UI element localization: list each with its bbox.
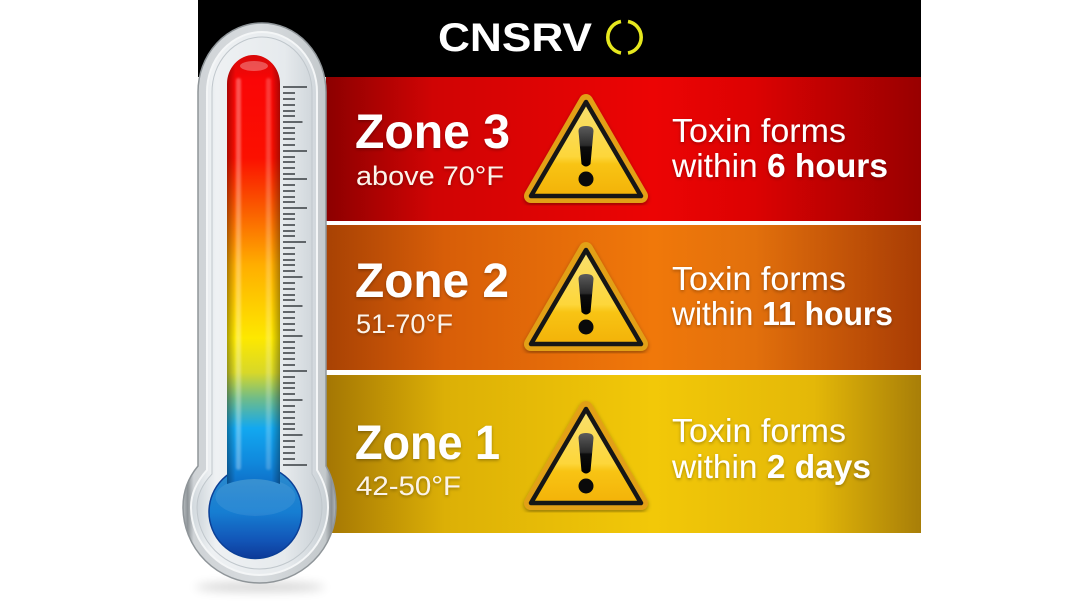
zone 3 toxin time: Toxin forms	[672, 112, 846, 149]
thermometer column	[227, 55, 280, 484]
panel: zone 2	[326, 225, 921, 370]
icon: warning triangle zone 2	[531, 249, 641, 344]
zone 2 temperature: 51-70°F	[356, 309, 453, 339]
zone 1 temperature: 42-50°F	[356, 471, 461, 501]
header bar	[198, 0, 921, 77]
zone 2 toxin duration: within 11 hours	[671, 295, 893, 332]
icon: warning triangle zone 3	[531, 101, 641, 196]
zone 3 toxin duration: within 6 hours	[671, 147, 888, 184]
zone 1 heading: Zone 1	[355, 417, 500, 470]
zone 3 heading: Zone 3	[355, 106, 510, 159]
icon: thermometer	[183, 23, 336, 591]
logo ring icon	[608, 22, 641, 53]
zone 2 toxin time: Toxin forms	[672, 260, 846, 297]
thermometer bulb	[209, 466, 302, 558]
zone 3 temperature: above 70°F	[356, 161, 504, 191]
zone 1 toxin time: Toxin forms	[672, 412, 846, 449]
panel: zone 1	[326, 375, 921, 533]
zone 2 heading: Zone 2	[355, 255, 509, 308]
icon: warning triangle zone 1	[531, 408, 641, 503]
panel: zone 3	[326, 77, 921, 221]
zone 1 toxin duration: within 2 days	[671, 448, 871, 485]
thermometer scale ticks	[283, 87, 307, 465]
logo wordmark: CNSRV	[438, 16, 592, 60]
